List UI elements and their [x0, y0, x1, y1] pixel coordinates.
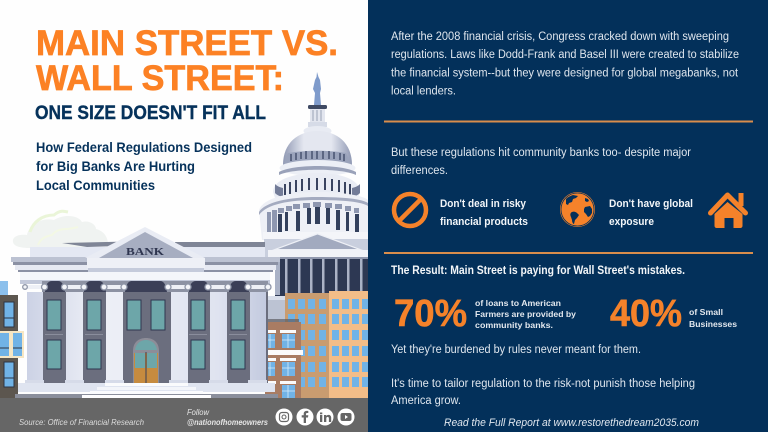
intro paragraph [391, 31, 739, 98]
icon: facebook [296, 408, 314, 426]
stat text: small businesses: Businesses [689, 319, 737, 329]
label: risky products: financial products [440, 216, 528, 228]
title [36, 24, 338, 98]
dome [283, 131, 352, 165]
closing text [391, 378, 695, 407]
stat text: small businesses [689, 307, 737, 329]
label: global exposure [609, 198, 693, 228]
facade [42, 285, 268, 383]
label: global exposure: exposure [609, 216, 654, 228]
differences text: differences. [391, 165, 448, 177]
label: global exposure: Don't have global [609, 198, 693, 210]
column capitals [25, 285, 268, 289]
differences text [391, 147, 691, 177]
left background [0, 0, 368, 432]
label: risky products: Don't deal in risky [440, 198, 527, 210]
illustration: city building left [0, 281, 24, 398]
illustration: cloud [13, 211, 108, 248]
illustration: Capitol building [259, 72, 368, 324]
stat text: small businesses: of Small [689, 307, 723, 317]
title: WALL STREET: [36, 59, 284, 98]
icon: globe [560, 192, 595, 227]
portico pediment [264, 239, 368, 259]
stat: 40%: 40% [610, 293, 682, 335]
illustration: bank building [11, 227, 280, 398]
stat text: loans: community banks. [475, 320, 553, 330]
icon: linkedin [316, 408, 334, 426]
title: MAIN STREET VS. [36, 24, 338, 63]
subheading: Local Communities [36, 177, 155, 193]
windows [47, 300, 245, 369]
subheading: How Federal Regulations Designed [36, 139, 252, 155]
pediment [85, 227, 205, 258]
label: risky products [440, 198, 528, 228]
intro paragraph: After the 2008 financial crisis, Congress cracked down with sweeping [391, 31, 729, 43]
intro paragraph: local lenders. [391, 86, 456, 98]
intro paragraph: the financial system--but they were designed for global megabanks, not [391, 68, 739, 80]
second tier [273, 173, 360, 198]
portico columns [275, 259, 368, 297]
steps [18, 383, 275, 392]
burdened text: Yet they're burdened by rules never meant for them. [391, 344, 641, 356]
statue [313, 72, 321, 105]
intro paragraph: regulations. Laws like Dodd-Frank and Basel III were created to stabilize [391, 49, 739, 61]
stat text: loans: of loans to American [475, 298, 561, 308]
subheading: for Big Banks Are Hurting [36, 158, 195, 174]
columns [27, 292, 266, 380]
follow handle [187, 407, 268, 427]
bank label: BANK [126, 246, 165, 258]
stat: 70%: 70% [394, 293, 467, 335]
icon: prohibition sign [394, 194, 426, 226]
panel: right column [368, 0, 768, 432]
stat text: loans [475, 298, 576, 330]
closing text: It's time to tailor regulation to the risk-not punish those helping [391, 378, 695, 390]
result heading: The Result: Main Street is paying for Wall Street's mistakes. [391, 265, 685, 277]
report link: Read the Full Report at www.restorethedream2035.com [444, 417, 699, 429]
icon: youtube [338, 408, 354, 426]
follow handle: Follow [187, 407, 210, 417]
third tier with colonnade [259, 192, 368, 240]
differences text: But these regulations hit community banks too- despite major [391, 147, 691, 159]
source: Source: Office of Financial Research [19, 417, 144, 427]
roof and cornice [62, 241, 152, 247]
illustration: city buildings right [265, 291, 368, 398]
footer bar [0, 398, 368, 432]
subtitle: one size: ONE SIZE DOESN'T FIT ALL [35, 102, 266, 124]
icon: house [710, 193, 746, 228]
icon: instagram [276, 408, 292, 426]
follow handle: @nationofhomeowners [187, 417, 268, 427]
closing text: America grow. [391, 395, 461, 407]
door [133, 338, 159, 383]
stat text: loans: Farmers are provided by [475, 309, 576, 319]
subheading [36, 139, 252, 193]
